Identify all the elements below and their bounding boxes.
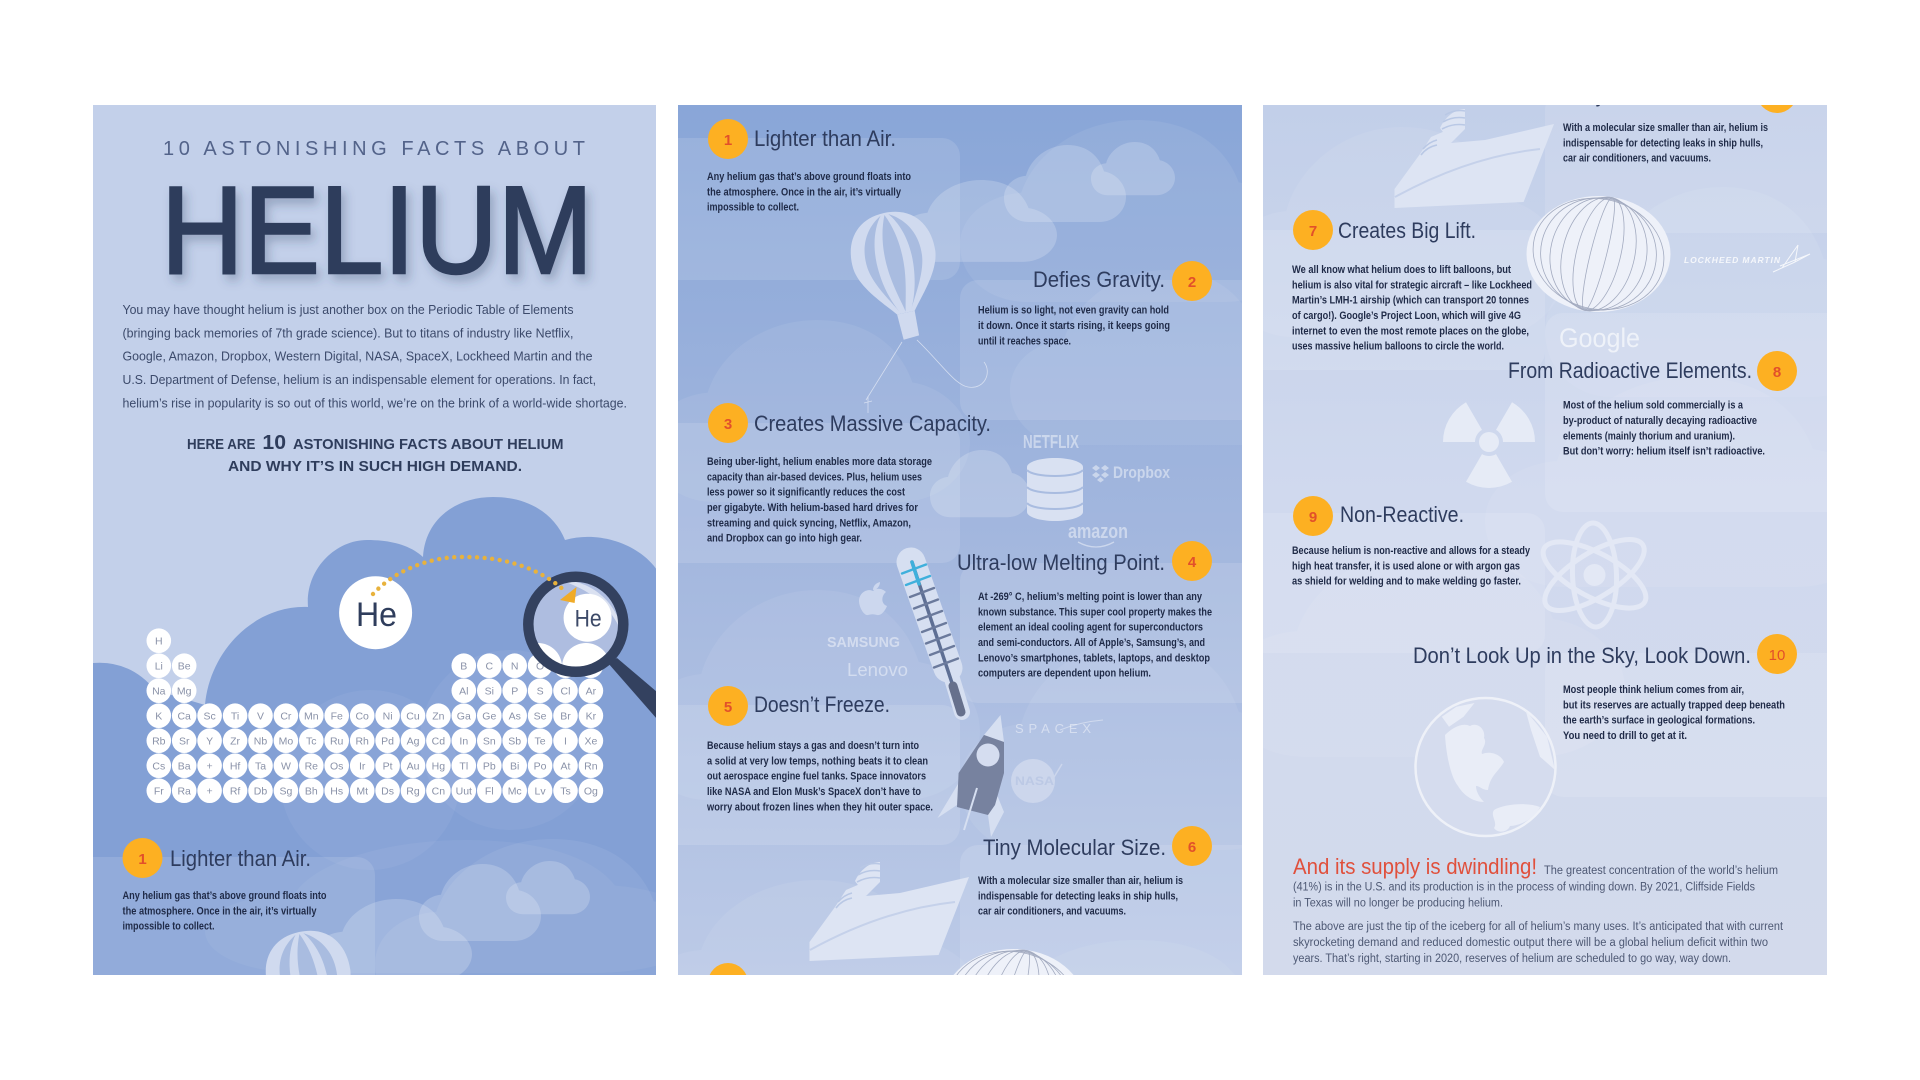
periodic table: Rg — [406, 786, 420, 798]
fact 6 continued — [1563, 105, 1793, 164]
periodic table: Bh — [305, 786, 318, 798]
periodic table: Zr — [230, 736, 241, 748]
periodic table: Hs — [330, 786, 343, 798]
periodic table: Tl — [459, 760, 468, 772]
fact 4 — [957, 541, 1212, 680]
periodic table: Fe — [331, 710, 343, 722]
fact 8 — [1508, 351, 1797, 458]
fact 3: less power so it significantly reduces the cost — [707, 487, 905, 499]
heading: here are 10 facts: AND WHY IT’S IN SUCH HIGH DEMAND. — [228, 458, 522, 475]
fact 7: internet to even the most remote places on the globe, — [1292, 325, 1529, 337]
periodic table: Hg — [432, 760, 445, 772]
fact 4: Lenovo’s smartphones, tablets, laptops, and desktop — [978, 652, 1210, 664]
fact 10: Don’t Look Up in the Sky, Look Down. — [1413, 643, 1751, 668]
periodic table: Au — [407, 760, 420, 772]
periodic table: W — [281, 760, 291, 772]
periodic table: Re — [305, 760, 318, 772]
periodic table: Sb — [508, 736, 521, 748]
fact 6: indispensable for detecting leaks in ship hulls, — [978, 890, 1178, 902]
icon: magnifying glass: He — [575, 606, 602, 633]
fact 10: 10 — [1769, 647, 1785, 664]
title: kicker: 10 ASTONISHING FACTS ABOUT — [163, 138, 585, 160]
periodic table: Ga — [457, 710, 471, 722]
periodic table: Rh — [355, 736, 369, 748]
periodic table: Pt — [383, 760, 393, 772]
periodic table: Tc — [306, 736, 317, 748]
periodic table: Cn — [432, 786, 445, 798]
icon: ship — [1394, 109, 1554, 208]
fact 2: Defies Gravity. — [1033, 267, 1165, 292]
icon: loon balloon top — [954, 949, 1074, 975]
periodic table: Ta — [255, 760, 266, 772]
periodic table: Cs — [152, 760, 165, 772]
heading: here are 10 facts — [188, 435, 562, 471]
fact 2: it down. Once it starts rising, it keeps going — [978, 320, 1170, 332]
fact 1: Lighter than Air. — [170, 846, 311, 871]
periodic table: + — [207, 786, 213, 798]
heading: here are 10 facts: ASTONISHING FACTS ABOUT HELIUM — [293, 436, 564, 453]
periodic table: Rb — [152, 736, 166, 748]
periodic table: At — [561, 760, 571, 772]
periodic table: Ca — [177, 710, 191, 722]
periodic table: Cr — [280, 710, 292, 722]
periodic table: Ts — [560, 786, 571, 798]
periodic table: Be — [178, 660, 191, 672]
fact 10 — [1413, 634, 1797, 742]
text block: introduction: helium’s rise in popularity is so out of this world, we’re on the brink of a world-wide shortage. — [122, 395, 627, 410]
callout: supply is dwindling: in Texas will no longer be producing helium. — [1293, 898, 1503, 910]
periodic table: Y — [206, 736, 213, 748]
fact 4: computers are dependent upon helium. — [978, 668, 1151, 680]
periodic table: Na — [152, 686, 166, 698]
fact 4: 4 — [1188, 554, 1197, 571]
fact 4: Ultra-low Melting Point. — [957, 550, 1165, 575]
periodic table: Nb — [254, 736, 267, 748]
fact 2: 2 — [1188, 274, 1196, 291]
periodic table: + — [207, 760, 213, 772]
periodic table: C — [486, 660, 494, 672]
periodic table: Ar — [586, 686, 597, 698]
periodic table: Co — [355, 710, 369, 722]
periodic table: Xe — [584, 736, 597, 748]
callout: supply is dwindling: And its supply is dwindling! — [1293, 854, 1537, 879]
panel: facts 1 to 6 — [678, 105, 1242, 975]
periodic table: Bi — [510, 760, 519, 772]
fact 1 — [122, 838, 327, 933]
fact 1: Any helium gas that’s above ground floats into — [122, 890, 327, 902]
fact 9: Because helium is non-reactive and allows for a steady — [1292, 545, 1531, 557]
periodic table: Br — [560, 710, 571, 722]
fact 3: per gigabyte. With helium-based hard drives for — [707, 502, 919, 514]
periodic table — [146, 628, 603, 803]
logo: NASA: NASA — [1015, 774, 1054, 788]
periodic table: Os — [330, 760, 343, 772]
fact 2: Helium is so light, not even gravity can hold — [978, 305, 1169, 317]
fact 7: of cargo!). Google’s Project Loon, which will give 4G — [1292, 310, 1521, 322]
periodic table: Mc — [508, 786, 522, 798]
logo: Lockheed Martin: LOCKHEED MARTIN — [1684, 255, 1781, 265]
periodic table: S — [537, 686, 544, 698]
fact 7: Martin’s LMH-1 airship (which can transport 20 tonnes — [1292, 295, 1529, 307]
text block: introduction: (bringing back memories of 7th grade science). But to titans of industry like Netflix, — [122, 326, 574, 340]
periodic table: Ir — [359, 760, 366, 772]
periodic table: K — [155, 710, 162, 722]
fact 7: 7 — [1309, 223, 1317, 240]
periodic table: Cu — [406, 710, 420, 722]
periodic table: Ru — [330, 736, 344, 748]
fact 8: But don’t worry: helium itself isn’t radioactive. — [1563, 446, 1765, 458]
fact 10: You need to drill to get at it. — [1563, 730, 1687, 742]
fact 2 — [978, 261, 1212, 347]
periodic table: Al — [459, 686, 468, 698]
icon: helium element circle — [339, 576, 412, 649]
logo: SpaceX: SPACEX — [1015, 721, 1091, 736]
fact 10: Most people think helium comes from air, — [1563, 684, 1744, 696]
icon: hot air balloon top — [266, 930, 350, 975]
fact 3: capacity than air-based devices. Plus, helium uses — [707, 471, 922, 483]
fact 9: Non-Reactive. — [1340, 502, 1464, 527]
fact 3: streaming and quick syncing, Netflix, Amazon, — [707, 517, 911, 529]
fact 1: 1 — [138, 851, 147, 868]
periodic table: Sn — [483, 736, 496, 748]
icon: helium element circle: He — [356, 596, 397, 634]
periodic table: Ra — [177, 786, 191, 798]
arrow: dotted arc — [373, 557, 576, 603]
icon: magnifying glass — [514, 577, 657, 719]
fact 6: Tiny Molecular Size. — [983, 835, 1166, 860]
periodic table: Te — [535, 736, 546, 748]
fact 5: worry about frozen lines when they hit outer space. — [706, 801, 933, 813]
periodic table: I — [564, 736, 567, 748]
periodic table: Ba — [178, 760, 191, 772]
fact 5 — [706, 686, 933, 813]
fact 1: the atmosphere. Once in the air, it’s virtually — [707, 186, 902, 198]
periodic table: Mo — [279, 736, 293, 748]
fact 7: Creates Big Lift. — [1338, 218, 1476, 243]
icon: loon balloon — [1526, 196, 1670, 312]
fact 6: With a molecular size smaller than air, helium is — [978, 875, 1183, 887]
fact 4: element an ideal cooling agent for superconductors — [978, 622, 1203, 634]
periodic table: Zn — [432, 710, 445, 722]
periodic table: Cl — [561, 686, 570, 698]
fact 7: We all know what helium does to lift balloons, but — [1292, 264, 1511, 276]
fact 1: the atmosphere. Once in the air, it’s virtually — [122, 905, 317, 917]
periodic table: Ti — [231, 710, 239, 722]
periodic table: Hf — [230, 760, 240, 772]
icon: database — [1027, 458, 1083, 521]
icon: globe — [1416, 698, 1556, 836]
text block: introduction: U.S. Department of Defense, helium is an indispensable element for operations. In fact, — [122, 372, 596, 387]
logo: Google: Google — [1559, 323, 1640, 353]
fact 5: out aerospace engine fuel tanks. Space innovators — [707, 771, 926, 783]
periodic table: P — [511, 686, 518, 698]
fact 5: Doesn’t Freeze. — [754, 692, 890, 717]
periodic table: Fr — [154, 786, 164, 798]
periodic table: Kr — [586, 710, 597, 722]
periodic table: Uut — [456, 786, 472, 798]
periodic table: V — [257, 710, 264, 722]
periodic table: Og — [584, 786, 598, 798]
periodic table: Mn — [304, 710, 319, 722]
callout: supply is dwindling — [1293, 854, 1778, 910]
periodic table: Si — [485, 686, 494, 698]
fact 9: high heat transfer, it is used alone or with argon gas — [1292, 560, 1520, 572]
periodic table: Sg — [279, 786, 292, 798]
fact 6 continued: With a molecular size smaller than air, helium is — [1563, 122, 1768, 134]
logo: Dropbox: Dropbox — [1113, 463, 1170, 482]
fact 1: Any helium gas that’s above ground floats into — [707, 171, 911, 183]
periodic table: Mg — [177, 686, 192, 698]
periodic table: As — [509, 710, 521, 722]
icon: hot air balloon — [843, 204, 987, 413]
fact 1: impossible to collect. — [122, 921, 214, 933]
text block: conclusion: years. That’s right, starting in 2020, reserves of helium are scheduled to go way, way down. — [1293, 953, 1731, 965]
logo: Amazon: amazon — [1068, 521, 1128, 543]
fact 2: until it reaches space. — [978, 335, 1071, 347]
fact 10: but its reserves are actually trapped deep beneath — [1563, 699, 1785, 711]
fact 3: Being uber-light, helium enables more data storage — [707, 456, 932, 468]
fact 3: and Dropbox can go into high gear. — [707, 533, 862, 545]
text block: conclusion: The above are just the tip of the iceberg for all of helium’s many uses. It’s anticipated that with current — [1293, 921, 1784, 933]
fact 3 — [707, 403, 991, 545]
fact 4: At -269° C, helium’s melting point is lower than any — [978, 591, 1203, 603]
periodic table: B — [460, 660, 467, 672]
periodic table: Lv — [535, 786, 546, 798]
periodic table: Cd — [432, 736, 445, 748]
fact 7: uses massive helium balloons to circle the world. — [1292, 341, 1504, 353]
fact 1: impossible to collect. — [707, 202, 799, 214]
icon: radiation — [1443, 402, 1535, 488]
text block: conclusion — [1293, 921, 1784, 965]
fact 4: and semi-conductors. All of Apple’s, Samsung’s, and — [978, 637, 1205, 649]
fact 8: by-product of naturally decaying radioactive — [1563, 415, 1757, 427]
fact 9 — [1292, 496, 1531, 588]
fact 6 — [978, 826, 1212, 918]
fact 7 cut off — [710, 963, 746, 975]
fact 8: Most of the helium sold commercially is a — [1563, 400, 1744, 412]
fact 9: as shield for welding and to make welding go faster. — [1292, 576, 1521, 588]
fact 9: 9 — [1309, 509, 1317, 526]
logo: Lenovo: Lenovo — [847, 660, 908, 680]
fact 3: 3 — [724, 416, 732, 433]
fact 7 cut off: Creates Big Lift. — [753, 971, 891, 996]
periodic table: Fl — [485, 786, 494, 798]
fact 8: 8 — [1773, 364, 1781, 381]
fact 4: known substance. This super cool property makes the — [978, 606, 1212, 618]
periodic table: N — [511, 660, 518, 672]
callout: supply is dwindling: The greatest concentration of the world’s helium — [1544, 865, 1778, 877]
fact 1 — [707, 119, 911, 214]
periodic table: Li — [155, 660, 163, 672]
panel: intro — [93, 105, 656, 975]
periodic table: Sr — [179, 736, 190, 748]
text block: introduction — [122, 302, 627, 410]
text block: conclusion: skyrocketing demand and reduced domestic output there will be a global helium deficit within two — [1293, 937, 1768, 949]
fact 6: car air conditioners, and vacuums. — [978, 906, 1126, 918]
icon: atom — [1534, 522, 1655, 628]
callout: supply is dwindling: (41%) is in the U.S. and its production is in the process of winding down. By 2021, Cliffside Fields — [1293, 882, 1755, 894]
fact 5: like NASA and Elon Musk’s SpaceX don’t have to — [707, 786, 921, 798]
periodic table: Ag — [407, 736, 420, 748]
periodic table: In — [459, 736, 468, 748]
logo: Lockheed Martin — [1684, 245, 1810, 272]
fact 5: Because helium stays a gas and doesn’t turn into — [707, 740, 919, 752]
fact 8: From Radioactive Elements. — [1508, 358, 1752, 383]
fact 6 continued: indispensable for detecting leaks in ship hulls, — [1563, 137, 1763, 149]
text block: introduction: Google, Amazon, Dropbox, Western Digital, NASA, SpaceX, Lockheed Martin and the — [122, 349, 592, 364]
fact 6: 6 — [1188, 839, 1196, 856]
fact 10: the earth’s surface in geological formations. — [1563, 715, 1755, 727]
fact 6 continued: Tiny Molecular Size. — [1568, 82, 1751, 107]
periodic table: Ge — [482, 710, 496, 722]
fact 6 continued: car air conditioners, and vacuums. — [1563, 153, 1711, 165]
icon: rocket — [938, 715, 1004, 837]
periodic table: Rf — [230, 786, 240, 798]
periodic table: Mt — [356, 786, 368, 798]
logo: Netflix: NETFLIX — [1023, 432, 1079, 452]
periodic table: Rn — [584, 760, 598, 772]
periodic table: Sc — [203, 710, 216, 722]
periodic table: Ni — [383, 710, 393, 722]
fact 1: 1 — [724, 132, 732, 149]
periodic table: O — [536, 660, 544, 672]
logo: SpaceX — [1016, 720, 1103, 733]
periodic table: Se — [534, 710, 547, 722]
heading: here are 10 facts: 10 — [262, 432, 286, 454]
panel: facts 6 to 10 — [1263, 105, 1827, 975]
logo: Apple — [859, 582, 887, 615]
periodic table: Pd — [381, 736, 394, 748]
logo: Amazon — [1068, 527, 1127, 548]
logo: Samsung: SAMSUNG — [827, 634, 900, 651]
icon: ship — [810, 862, 969, 961]
fact 5: a solid at very low temps, nothing beats it to clean — [707, 755, 928, 767]
fact 7: helium is also vital for strategic aircraft – like Lockheed — [1292, 279, 1532, 291]
periodic table: Ds — [381, 786, 394, 798]
text block: introduction: You may have thought helium is just another box on the Periodic Table of Elements — [122, 302, 574, 317]
fact 3: Creates Massive Capacity. — [754, 411, 991, 436]
logo: Dropbox — [1092, 465, 1170, 482]
fact 1: Lighter than Air. — [754, 126, 896, 151]
fact 8: elements (mainly thorium and uranium). — [1563, 430, 1735, 442]
fact 5: 5 — [724, 699, 732, 716]
periodic table: Po — [534, 760, 547, 772]
fact 7 — [1292, 210, 1532, 353]
periodic table: Pb — [483, 760, 496, 772]
periodic table: H — [155, 636, 163, 648]
heading: here are 10 facts: HERE ARE — [187, 436, 255, 453]
title: HELIUM: HELIUM — [161, 162, 593, 300]
icon: thermometer — [902, 562, 962, 712]
logo: NASA — [1011, 759, 1062, 803]
periodic table: Db — [254, 786, 267, 798]
